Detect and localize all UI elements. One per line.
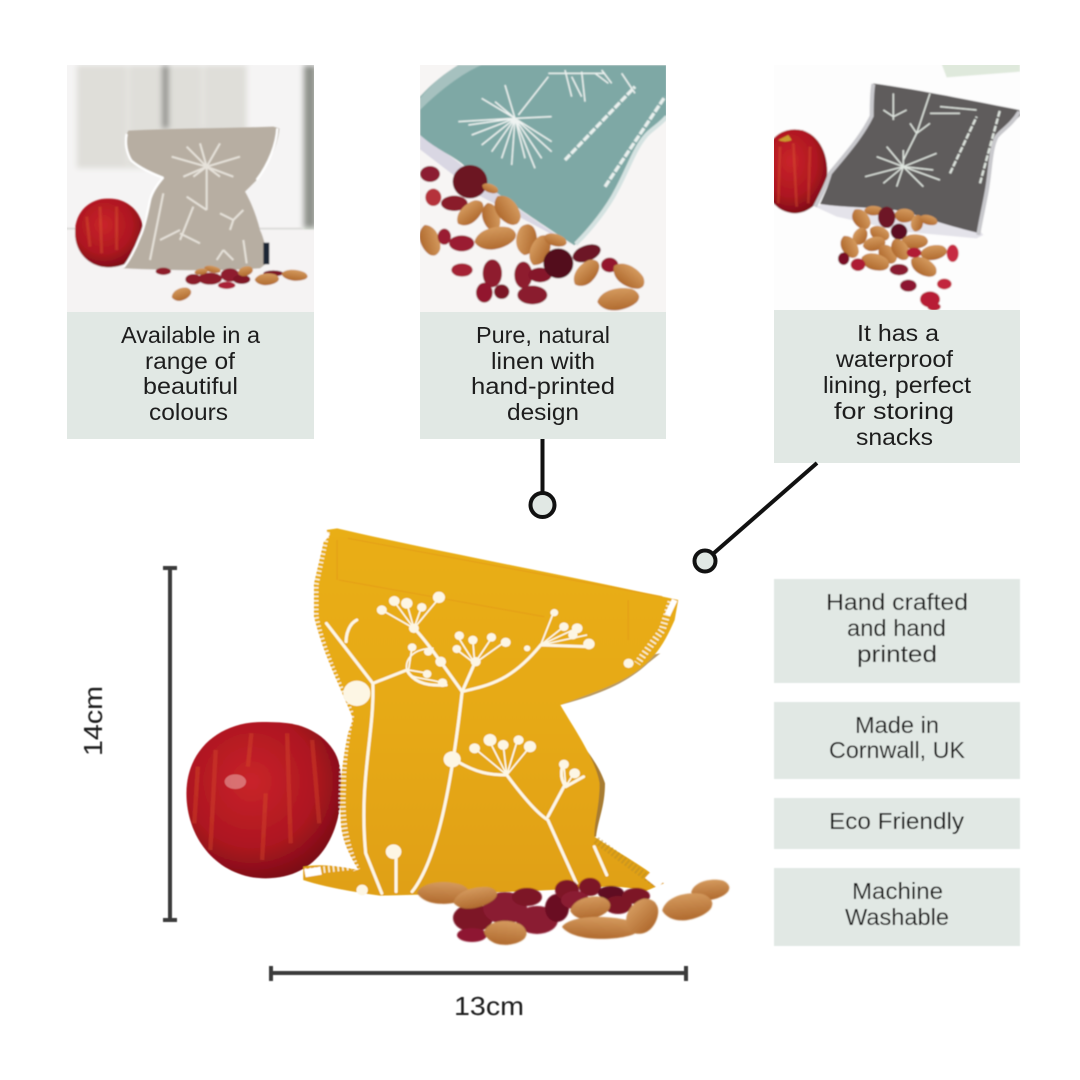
caption background xyxy=(420,312,666,439)
caption text: hand-printed xyxy=(471,373,615,399)
feature: machine washable xyxy=(774,868,1020,946)
connector: linen callout xyxy=(530,439,554,517)
caption text: Available in a xyxy=(121,322,260,348)
photo: grey bag with nuts xyxy=(774,65,1020,310)
caption text: linen with xyxy=(491,348,595,374)
caption text xyxy=(471,322,615,425)
panel: waterproof xyxy=(763,60,1037,463)
feature: made in Cornwall: Cornwall, UK xyxy=(829,737,966,763)
caption text: It has a xyxy=(857,320,939,346)
feature: hand crafted: Hand crafted xyxy=(826,589,968,615)
caption text: snacks xyxy=(856,424,933,450)
caption text xyxy=(823,320,972,450)
panel: linen xyxy=(415,60,682,439)
feature: eco friendly xyxy=(774,798,1020,849)
dimension: height 14cm: 14cm xyxy=(78,686,108,756)
dimension: width 13cm: 13cm xyxy=(454,991,524,1021)
almonds and cranberries xyxy=(416,878,730,947)
caption background xyxy=(774,310,1020,463)
caption background xyxy=(67,312,314,439)
feature: made in Cornwall: Made in xyxy=(855,712,939,738)
main product image: yellow bag, apple and nuts xyxy=(78,528,1020,1021)
feature: eco friendly: Eco Friendly xyxy=(829,808,965,834)
caption text: beautiful xyxy=(143,373,238,399)
feature: hand crafted: printed xyxy=(857,641,937,667)
feature: machine washable: Machine xyxy=(852,878,943,904)
photo: teal bag with spilling nuts xyxy=(420,65,666,312)
dimension: height 14cm xyxy=(78,568,177,920)
connector: waterproof callout xyxy=(694,463,817,572)
yellow linen bag xyxy=(303,528,678,896)
feature: hand crafted: and hand xyxy=(847,615,946,641)
seams xyxy=(305,530,675,885)
caption text: waterproof xyxy=(835,346,954,372)
panel: colours xyxy=(60,60,327,439)
feature: machine washable: Washable xyxy=(845,904,949,930)
caption text: Pure, natural xyxy=(476,322,610,348)
photo: taupe bag with apple xyxy=(67,65,314,312)
caption text: range of xyxy=(145,348,236,374)
feature: made in Cornwall xyxy=(774,702,1020,779)
apple xyxy=(186,722,341,878)
caption text: for storing xyxy=(834,398,954,424)
dimension: width 13cm xyxy=(271,966,686,1021)
caption text xyxy=(121,322,260,425)
caption text: lining, perfect xyxy=(823,372,972,398)
feature: hand crafted xyxy=(774,579,1020,683)
caption text: colours xyxy=(149,399,228,425)
caption text: design xyxy=(507,399,579,425)
white plant print xyxy=(326,620,607,893)
